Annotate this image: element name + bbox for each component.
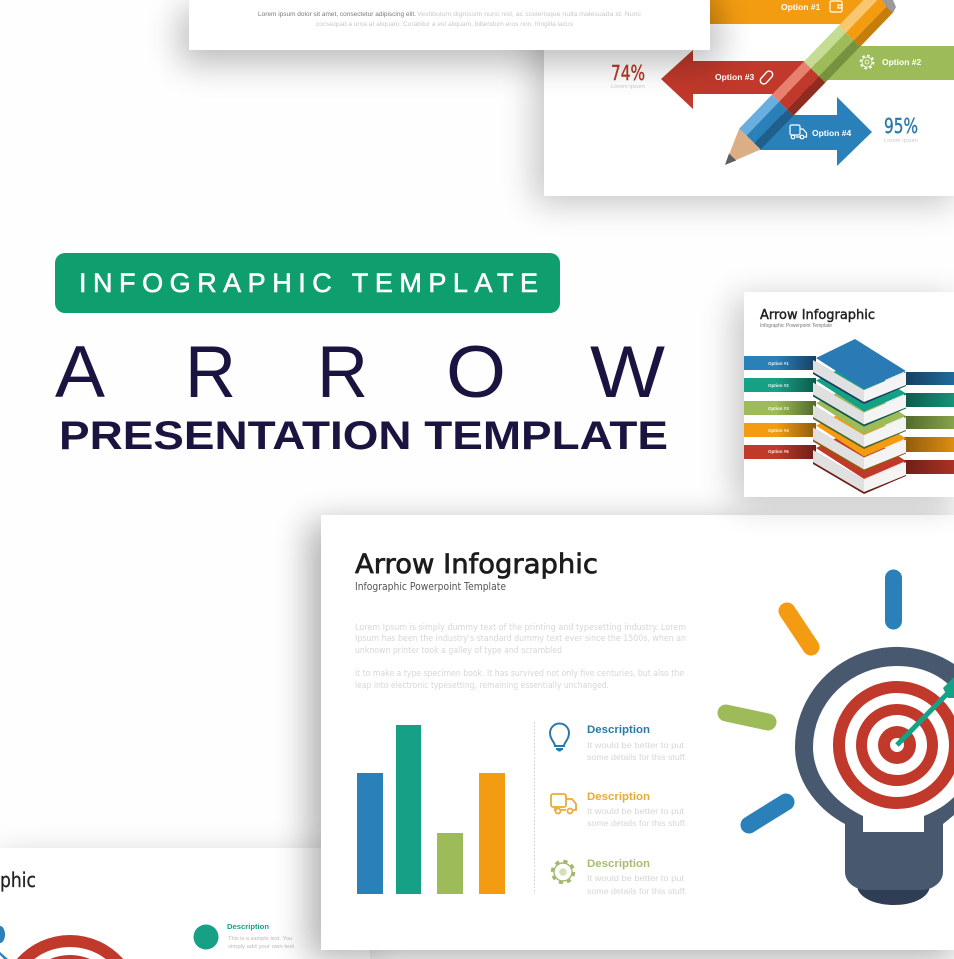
title: ARROW: W bbox=[590, 332, 665, 413]
bulb glass and base bbox=[795, 647, 954, 832]
left option ribbons: Option #5 bbox=[768, 449, 789, 454]
option 4 arrow: Option #4 bbox=[812, 128, 851, 138]
caption text: Vestibulum dignissim nunc nisl, ac scelerisque nulla malesuada id. Nunc bbox=[417, 11, 642, 18]
icon: truck bbox=[790, 125, 806, 139]
pencil tip bbox=[714, 129, 761, 175]
description 3: some details for this stuff. bbox=[587, 886, 687, 896]
orange segment bbox=[839, 0, 893, 47]
heading badge: INFOGRAPHIC TEMPLATE bbox=[79, 268, 538, 298]
stat: 95 percent: Lorem ipsum bbox=[884, 138, 918, 144]
title: ARROW: O bbox=[446, 332, 506, 413]
book 5 red bbox=[813, 429, 906, 494]
left option ribbons: Option #3 bbox=[768, 406, 789, 411]
icon: gear bbox=[860, 56, 874, 68]
body paragraph: leap into electronic typesetting, remaining essentially unchanged. bbox=[355, 681, 609, 691]
description 2: Description bbox=[587, 791, 650, 803]
target arcs fragment bbox=[17, 935, 123, 959]
option 1 ribbon: Option #1 bbox=[781, 2, 820, 12]
description 1 bbox=[587, 724, 687, 762]
right option ribbons bbox=[904, 372, 954, 474]
description 3: It would be better to put bbox=[587, 873, 685, 883]
stat: 74 percent bbox=[611, 61, 645, 90]
legend text: simply add your own text bbox=[228, 944, 295, 950]
book 2 teal bbox=[813, 362, 906, 426]
icon: paperclip bbox=[759, 70, 774, 85]
body paragraph bbox=[355, 623, 686, 691]
option 2 ribbon: Option #2 bbox=[882, 57, 921, 67]
stat: 74 percent: 74% bbox=[611, 61, 645, 85]
bar chart bbox=[357, 725, 505, 894]
option 3 arrow bbox=[661, 50, 825, 109]
description 1: some details for this stuff. bbox=[587, 752, 687, 762]
book 3 green bbox=[813, 384, 906, 449]
slide subtitle: Infographic Powerpoint Template bbox=[760, 323, 832, 329]
book stack bbox=[813, 339, 906, 494]
slide title: Arrow Infographic bbox=[760, 308, 875, 323]
pencil bbox=[714, 0, 896, 175]
description 3: Description bbox=[587, 858, 650, 870]
legend text bbox=[227, 922, 295, 950]
description 3 bbox=[587, 858, 687, 896]
body paragraph: unknown printer took a galley of type and scrambled bbox=[355, 646, 562, 656]
caption text: consequat a urna at aliquam. Curabitur a est aliquam, bibendum eros non, fringilla lacus bbox=[316, 21, 574, 28]
book 4 orange bbox=[813, 406, 906, 472]
book 1 blue bbox=[813, 339, 906, 404]
panel: top slide (cropped) bbox=[180, 0, 720, 64]
title: presentation template: PRESENTATION TEMPLATE bbox=[59, 414, 668, 458]
target rings bbox=[833, 681, 954, 809]
body paragraph: it to make a type specimen book. It has survived not only five centuries, but also the bbox=[355, 669, 684, 679]
dart fragment bbox=[0, 926, 8, 959]
option 1 ribbon bbox=[710, 0, 870, 24]
green segment bbox=[804, 26, 860, 83]
caption text bbox=[258, 11, 642, 28]
description 2: some details for this stuff. bbox=[587, 818, 687, 828]
blue segment bbox=[739, 95, 793, 149]
icon: light bulb with target bbox=[795, 647, 954, 905]
slide subtitle: Infographic Powerpoint Template bbox=[355, 581, 506, 593]
slide title: Arrow Infographic bbox=[355, 549, 598, 580]
description 1: It would be better to put bbox=[587, 740, 685, 750]
description 2: It would be better to put bbox=[587, 806, 685, 816]
light rays bbox=[726, 578, 894, 825]
title: ARROW bbox=[55, 332, 665, 413]
left option ribbons: Option #4 bbox=[768, 428, 789, 433]
legend text: Description bbox=[227, 922, 269, 931]
left option ribbons: Option #2 bbox=[768, 383, 789, 388]
heading badge bbox=[55, 253, 560, 313]
title: ARROW: R bbox=[317, 332, 368, 413]
body paragraph: Lorem Ipsum is simply dummy text of the printing and typesetting industry. Lorem bbox=[355, 623, 686, 633]
option 2 ribbon bbox=[810, 46, 954, 80]
option 3 arrow: Option #3 bbox=[715, 72, 754, 82]
left option ribbons bbox=[744, 356, 816, 459]
red segment bbox=[772, 62, 825, 116]
legend text: This is a sample text. You bbox=[228, 936, 292, 942]
title: ARROW: A bbox=[55, 332, 105, 413]
body paragraph: Ipsum has been the industry's standard dummy text ever since the 1500s, when an bbox=[355, 634, 686, 644]
icon: light bulb bbox=[550, 724, 569, 750]
stat: 95 percent: 95% bbox=[884, 114, 918, 138]
stat: 74 percent: Lorem ipsum bbox=[611, 84, 645, 90]
left option ribbons: Option #1 bbox=[768, 361, 789, 366]
pencil eraser end bbox=[879, 0, 896, 13]
description 1: Description bbox=[587, 724, 650, 736]
icon: wallet bbox=[830, 1, 842, 12]
panel: large slide bbox=[308, 515, 954, 959]
panel: bottom-left slide (partly cropped) bbox=[0, 848, 370, 959]
caption text: Lorem ipsum dolor sit amet, consectetur adipiscing elit. bbox=[258, 11, 416, 18]
icon: gear bbox=[552, 862, 574, 882]
panel: pencil arrows slide bbox=[534, 0, 954, 204]
stat: 95 percent bbox=[884, 114, 918, 144]
option 4 arrow bbox=[750, 97, 872, 166]
title: ARROW: R bbox=[185, 332, 236, 413]
panel: book stack slide bbox=[734, 292, 954, 504]
bulb cap bbox=[857, 885, 930, 905]
legend dot bbox=[194, 924, 218, 950]
icon: delivery truck bbox=[551, 794, 576, 814]
description 2 bbox=[587, 791, 687, 828]
slide title fragment: phic bbox=[0, 868, 36, 892]
dart bbox=[897, 677, 954, 745]
